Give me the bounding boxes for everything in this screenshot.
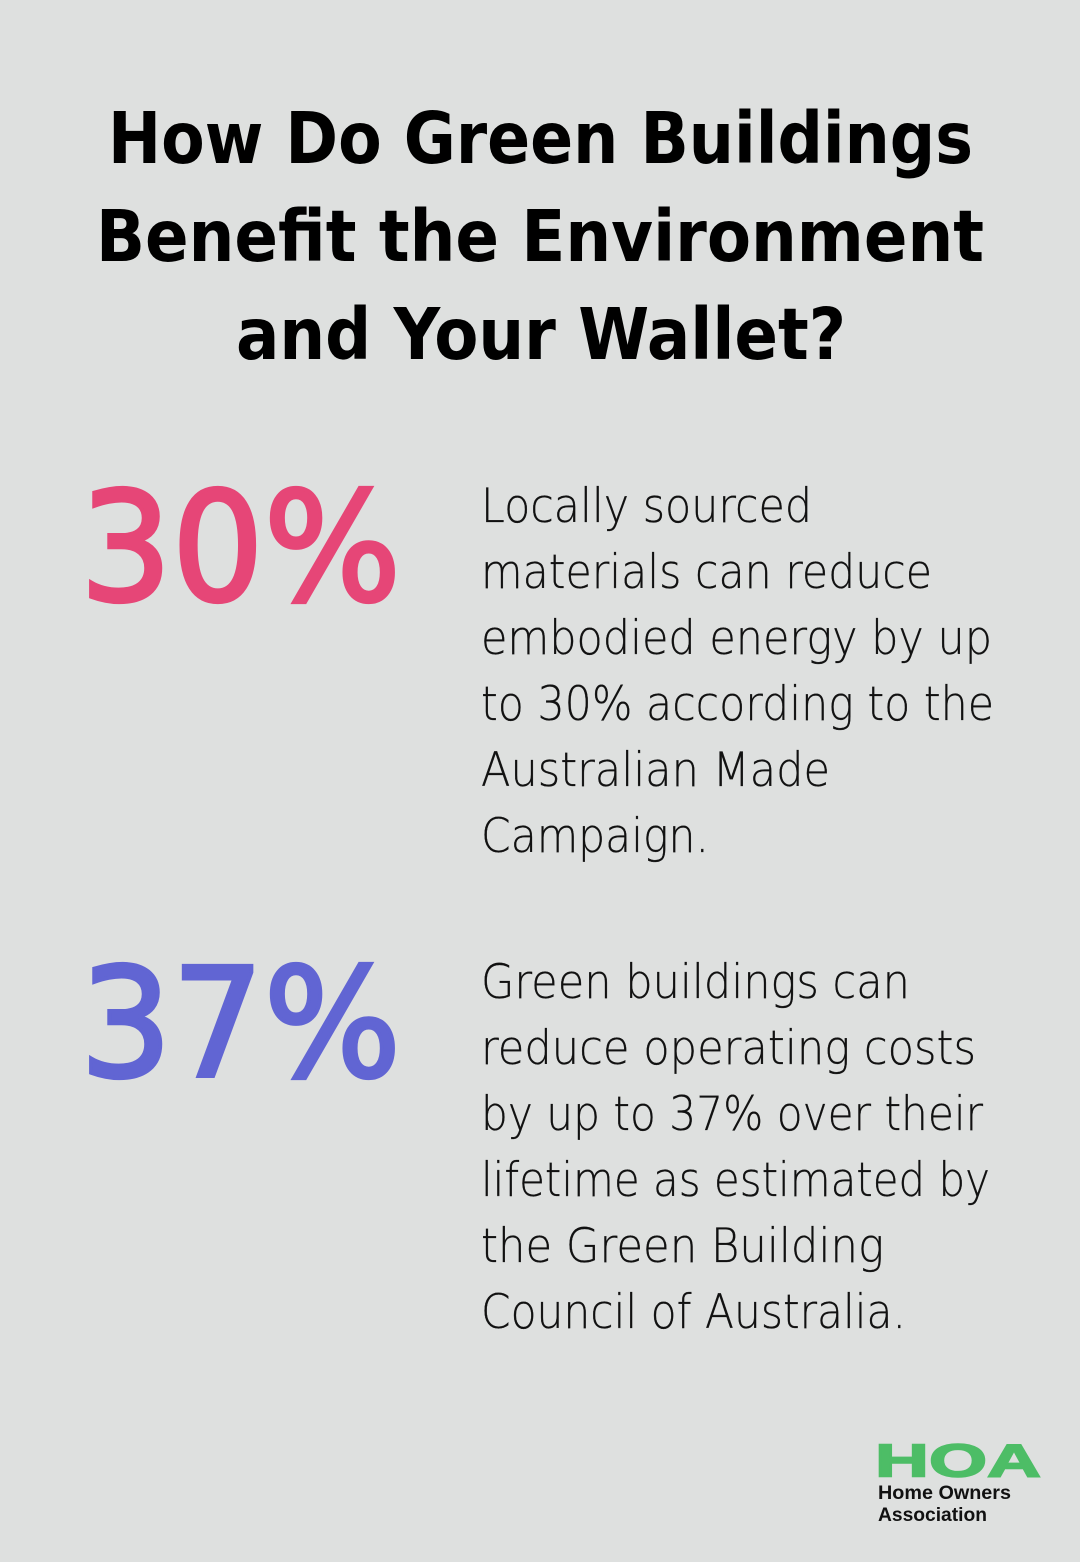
- text block: locally sourced materials: [481, 479, 994, 864]
- stat: 37%: 37%: [80, 936, 401, 1112]
- text block: locally sourced materials: embodied energy by up: [481, 611, 992, 666]
- text block: green buildings operating costs: Green buildings can: [481, 955, 910, 1010]
- logo: HOA Home Owners Association: Association: [878, 1505, 987, 1526]
- text block: green buildings operating costs: the Green Building: [481, 1219, 884, 1274]
- title: and Your Wallet?: [236, 293, 846, 376]
- stat: 30%: 30%: [80, 460, 401, 636]
- logo: HOA Home Owners Association: Home Owners: [878, 1483, 1011, 1504]
- text block: green buildings operating costs: by up to 37% over their: [481, 1087, 984, 1142]
- text block: green buildings operating costs: [481, 955, 990, 1340]
- text block: locally sourced materials: to 30% according to the: [481, 677, 994, 732]
- title: [96, 97, 984, 376]
- text block: locally sourced materials: materials can reduce: [481, 545, 932, 600]
- title: Benefit the Environment: [96, 195, 984, 278]
- title: How Do Green Buildings: [108, 97, 973, 180]
- text block: green buildings operating costs: lifetime as estimated by: [481, 1153, 990, 1208]
- text block: locally sourced materials: Locally sourced: [481, 479, 812, 534]
- text block: locally sourced materials: Campaign.: [481, 809, 709, 864]
- text block: green buildings operating costs: Council of Australia.: [481, 1285, 906, 1340]
- text block: locally sourced materials: Australian Made: [481, 743, 830, 798]
- logo: HOA Home Owners Association: HOA: [875, 1434, 1041, 1486]
- text block: green buildings operating costs: reduce operating costs: [481, 1021, 976, 1076]
- logo: HOA Home Owners Association: [875, 1434, 1041, 1526]
